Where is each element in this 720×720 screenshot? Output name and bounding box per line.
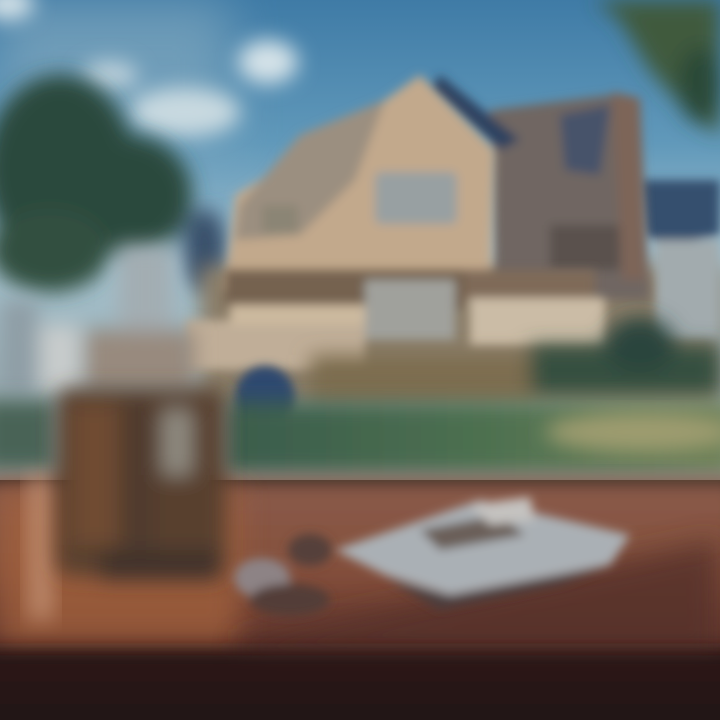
lawn (225, 402, 720, 474)
jar (56, 388, 226, 580)
blue object on lawn (235, 366, 295, 430)
house: main gable (225, 75, 495, 290)
far right house (640, 180, 720, 340)
table front edge (0, 652, 720, 720)
papers (335, 497, 630, 610)
shrubs and foundation (0, 317, 720, 470)
sky (0, 0, 720, 480)
coins beside jar (234, 534, 332, 616)
porch (185, 270, 605, 370)
tree: left (0, 75, 227, 292)
tree: top right (595, 0, 720, 135)
table (0, 475, 720, 660)
white structure behind jar (0, 245, 195, 395)
house: right wing (430, 75, 650, 300)
midground backdrop (200, 265, 720, 405)
clouds (0, 0, 298, 136)
